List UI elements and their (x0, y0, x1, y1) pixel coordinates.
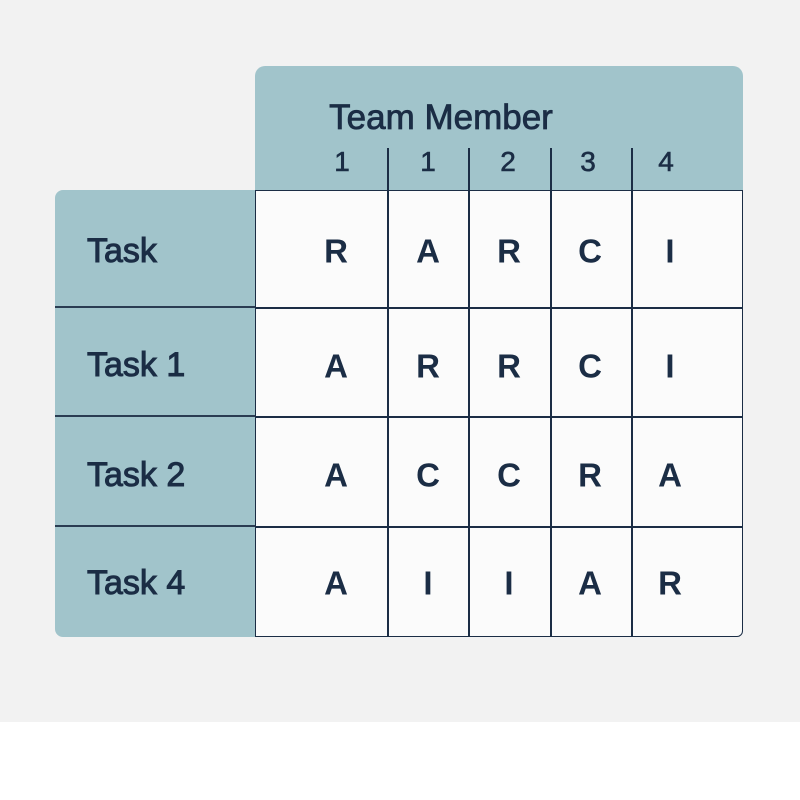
row label texts (87, 232, 185, 602)
row label texts: Task 2 (87, 456, 185, 494)
cell letters: R (324, 232, 348, 270)
cell letters: C (497, 456, 521, 494)
cell letters: I (665, 232, 675, 270)
row label texts: Task 4 (87, 564, 185, 602)
cell letters: R (658, 564, 682, 602)
grid (255, 190, 743, 637)
heading: team member: Team Member (329, 98, 553, 137)
row label texts: Task 1 (87, 346, 185, 384)
column numbers: 2 (500, 146, 516, 177)
cell letters: C (578, 348, 602, 384)
panel: row labels (55, 190, 255, 637)
cell letters: I (504, 564, 514, 602)
row label texts: Task (87, 232, 157, 270)
panel: header (255, 66, 743, 191)
column numbers: 1 (420, 146, 436, 177)
cell letters: R (497, 348, 521, 384)
cell letters: I (423, 564, 433, 602)
cell letters: A (324, 456, 348, 494)
column numbers: 3 (580, 146, 596, 177)
cell letters: I (665, 348, 675, 384)
cell letters: A (578, 564, 602, 602)
cell letters: R (578, 456, 602, 494)
cell letters: A (324, 564, 348, 602)
column numbers: 4 (658, 146, 674, 177)
cell letters: A (658, 456, 682, 494)
cell letters: R (497, 232, 521, 270)
column numbers: 1 (334, 146, 350, 177)
column numbers (334, 146, 674, 190)
cell letters: A (324, 348, 348, 384)
cell letters: A (416, 232, 440, 270)
cell letters: R (416, 348, 440, 384)
cell letters: C (578, 232, 602, 270)
cell letters: C (416, 456, 440, 494)
